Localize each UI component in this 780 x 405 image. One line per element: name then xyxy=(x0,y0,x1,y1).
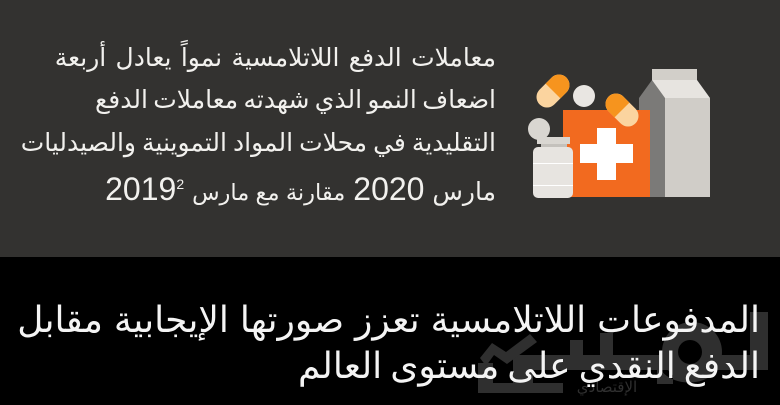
icon: pharmacy and grocery items xyxy=(528,69,710,198)
heading: الدفع النقدي على مستوى العالم xyxy=(298,345,760,386)
text block: paragraph xyxy=(21,40,496,207)
panel: dark top section xyxy=(0,0,780,257)
heading: المدفوعات اللاتلامسية تعزز صورتها الإيجابية مقابل xyxy=(17,299,760,340)
icon: orange first aid box xyxy=(563,110,650,197)
icon: round pill xyxy=(573,85,595,107)
icon: capsule right xyxy=(601,89,643,131)
icon: pill bottle xyxy=(528,118,573,198)
watermark logo xyxy=(478,312,768,397)
heading xyxy=(17,299,760,387)
icon: capsule left xyxy=(532,70,574,112)
text block: paragraph: مارس 2020 مقارنة مع مارس 20192 xyxy=(105,171,496,207)
text block: paragraph: التقليدية في محلات المواد التموينية والصيدليات xyxy=(21,129,496,157)
text block: paragraph: اضعاف النمو الذي شهدته معاملات الدفع xyxy=(95,86,496,114)
watermark logo: الإقتصادي xyxy=(577,378,637,397)
icon: carton xyxy=(639,69,710,197)
text block: paragraph: معاملات الدفع اللاتلامسية نمواً يعادل أربعة xyxy=(55,44,496,72)
